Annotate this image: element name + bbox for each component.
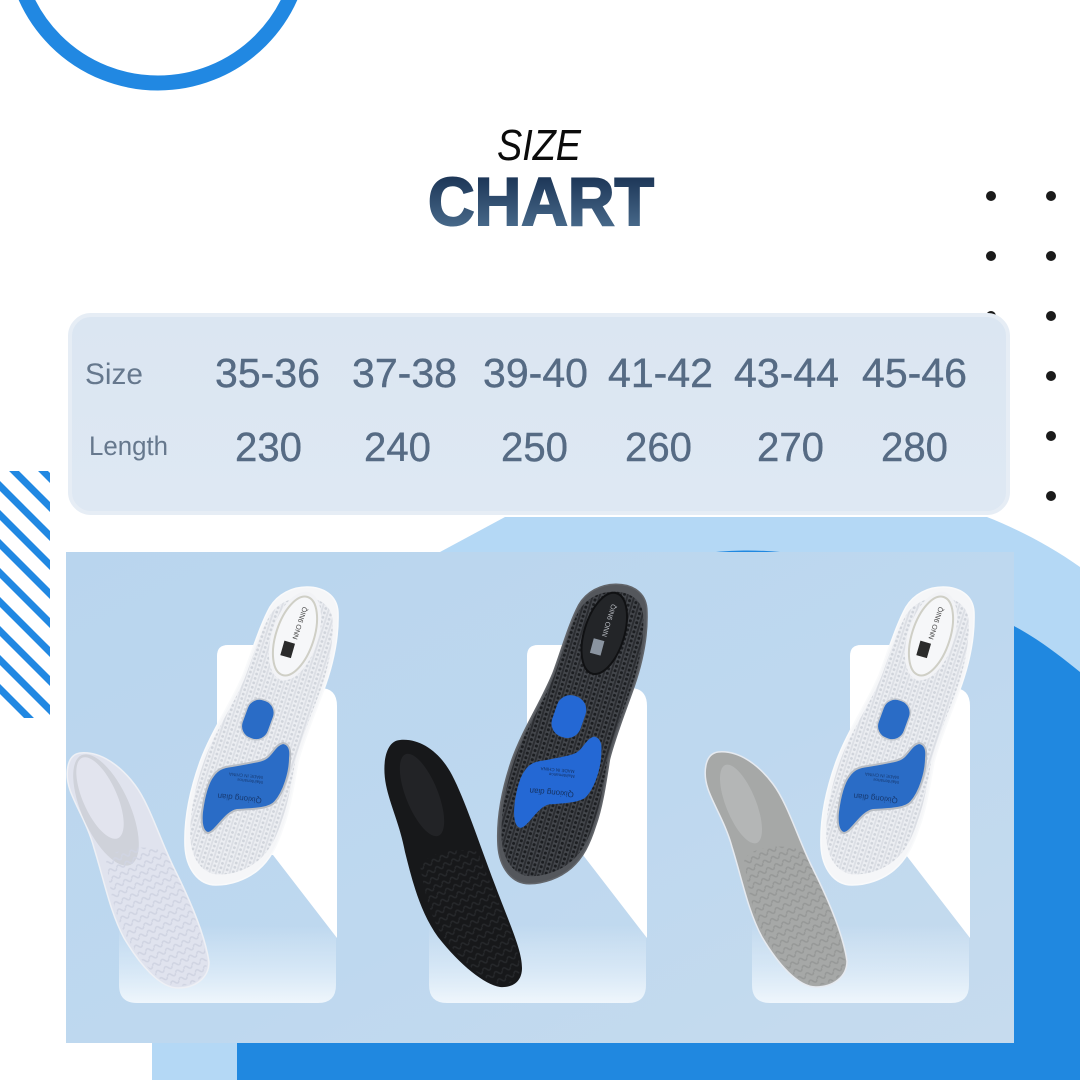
length values: 280 [881,424,948,470]
dark blue background shape [237,550,1080,1080]
size values: 39-40 [483,350,588,396]
heel badge: NNO 9NIQ [928,606,946,641]
light blue background shape [152,517,1080,1080]
decorative ring top-left [13,0,303,83]
length values [235,424,948,470]
length values: 250 [501,424,568,470]
blue arch pad: MADE IN CHINA [540,766,575,774]
title [428,121,654,240]
insole 1: white underside [185,585,338,885]
heel badge: NNO 9NIQ [292,606,310,641]
blue arch pad: Qixiong dian [853,791,898,805]
insole 3: top surface grey [705,752,847,987]
insole 1: top surface white [60,745,209,988]
blue arch pad: Maintenance [236,777,263,785]
heel cup [711,759,771,849]
title line: SIZE: SIZE [497,121,582,170]
size values: 37-38 [352,350,457,396]
insole 3: white underside [821,585,974,885]
insole 2: black underside [493,584,652,884]
white card 3 [752,645,970,1003]
heel badge [259,585,331,687]
size values: 43-44 [734,350,839,396]
white card 2 [429,645,647,1003]
row label: Length: Length [89,431,168,461]
forefoot texture [744,846,845,985]
blue oval pad [874,695,914,744]
blue oval pad [548,691,590,742]
blue arch pad: MADE IN CHINA [229,771,263,780]
product photo panel [60,552,1014,1043]
blue arch pad: Maintenance [872,777,899,785]
length values: 260 [625,424,692,470]
heel badge: NNO 9NIQ [602,603,618,638]
diagonal stripes left [0,471,50,718]
forefoot texture [420,850,520,984]
size values: 45-46 [862,350,967,396]
heel badge [571,587,637,680]
heel cup [60,745,152,875]
blue arch pad [838,743,926,833]
title line: CHART: CHART [428,164,654,240]
blue arch pad [513,736,603,828]
dot grid right [986,191,1056,501]
length values: 230 [235,424,302,470]
blue arch pad [202,743,290,833]
blue oval pad [238,695,278,744]
blue arch pad: MADE IN CHINA [865,771,899,780]
blue arch pad: Maintenance [548,772,575,779]
blue arch pad: Qixiong dian [529,786,574,799]
size table panel [70,315,1008,513]
length values: 240 [364,424,431,470]
size values [215,350,967,396]
heel cup [391,748,453,842]
forefoot texture [106,847,207,986]
heel badge [895,585,967,687]
white card 1 [119,645,337,1003]
size values: 35-36 [215,350,320,396]
size values: 41-42 [608,350,713,396]
length values: 270 [757,424,824,470]
row label: Size: Size [85,358,143,391]
insole 2: top surface black [384,740,522,987]
blue arch pad: Qixiong dian [217,791,262,805]
